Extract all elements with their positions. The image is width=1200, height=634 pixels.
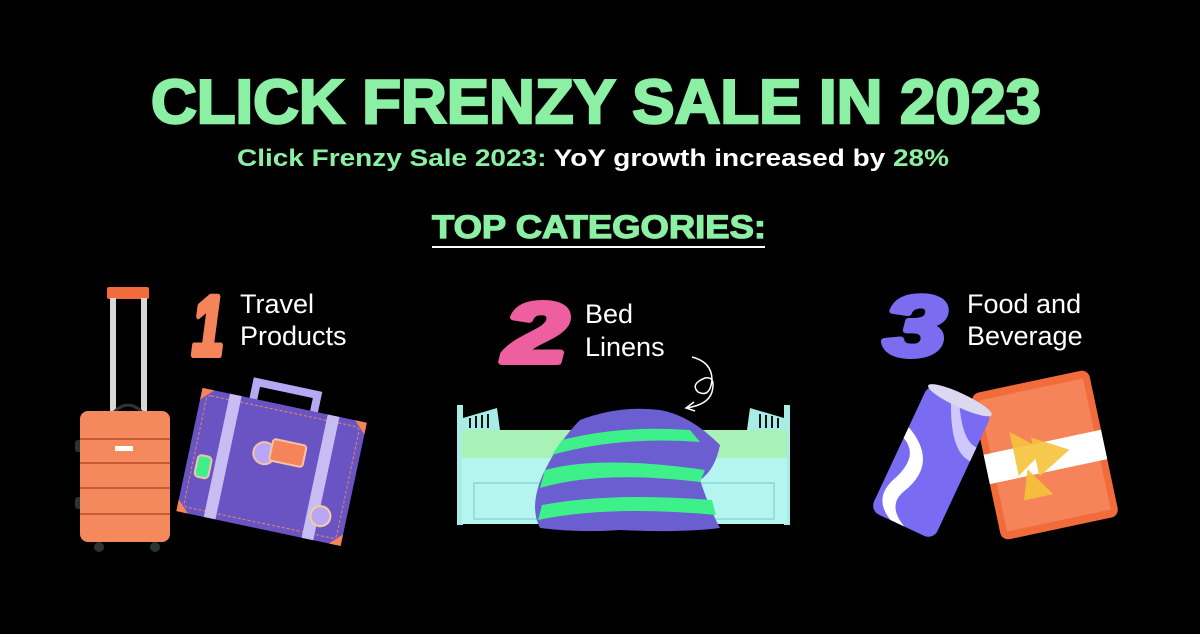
icon: soda can: [870, 379, 995, 540]
category 1 label: [192, 279, 347, 373]
arrow: curly arrow to blanket: [686, 357, 713, 411]
icon: purple vintage suitcase: [176, 371, 370, 546]
icon: orange trolley suitcase: [75, 287, 170, 552]
category 2 label: 2: [501, 286, 568, 380]
category 1 label: Travel: [240, 289, 314, 319]
heading: top categories: TOP CATEGORIES:: [432, 209, 766, 245]
icon: bed with blanket: [457, 405, 790, 531]
category 1 label: Products: [240, 321, 347, 351]
category 3 label: Food and: [967, 289, 1081, 319]
category 2 label: [501, 286, 665, 380]
icon: chip bag: [971, 369, 1119, 541]
category 2 label: Linens: [585, 332, 665, 362]
category 3 label: [884, 279, 1083, 373]
category 3 label: 3: [884, 279, 946, 373]
category 2 label: Bed: [585, 299, 633, 329]
category 1 label: 1: [192, 279, 224, 373]
subtitle: Click Frenzy Sale 2023: YoY growth increased by 28%: [237, 145, 949, 172]
title: CLICK FRENZY SALE IN 2023: [151, 68, 1041, 137]
category 3 label: Beverage: [967, 321, 1083, 351]
